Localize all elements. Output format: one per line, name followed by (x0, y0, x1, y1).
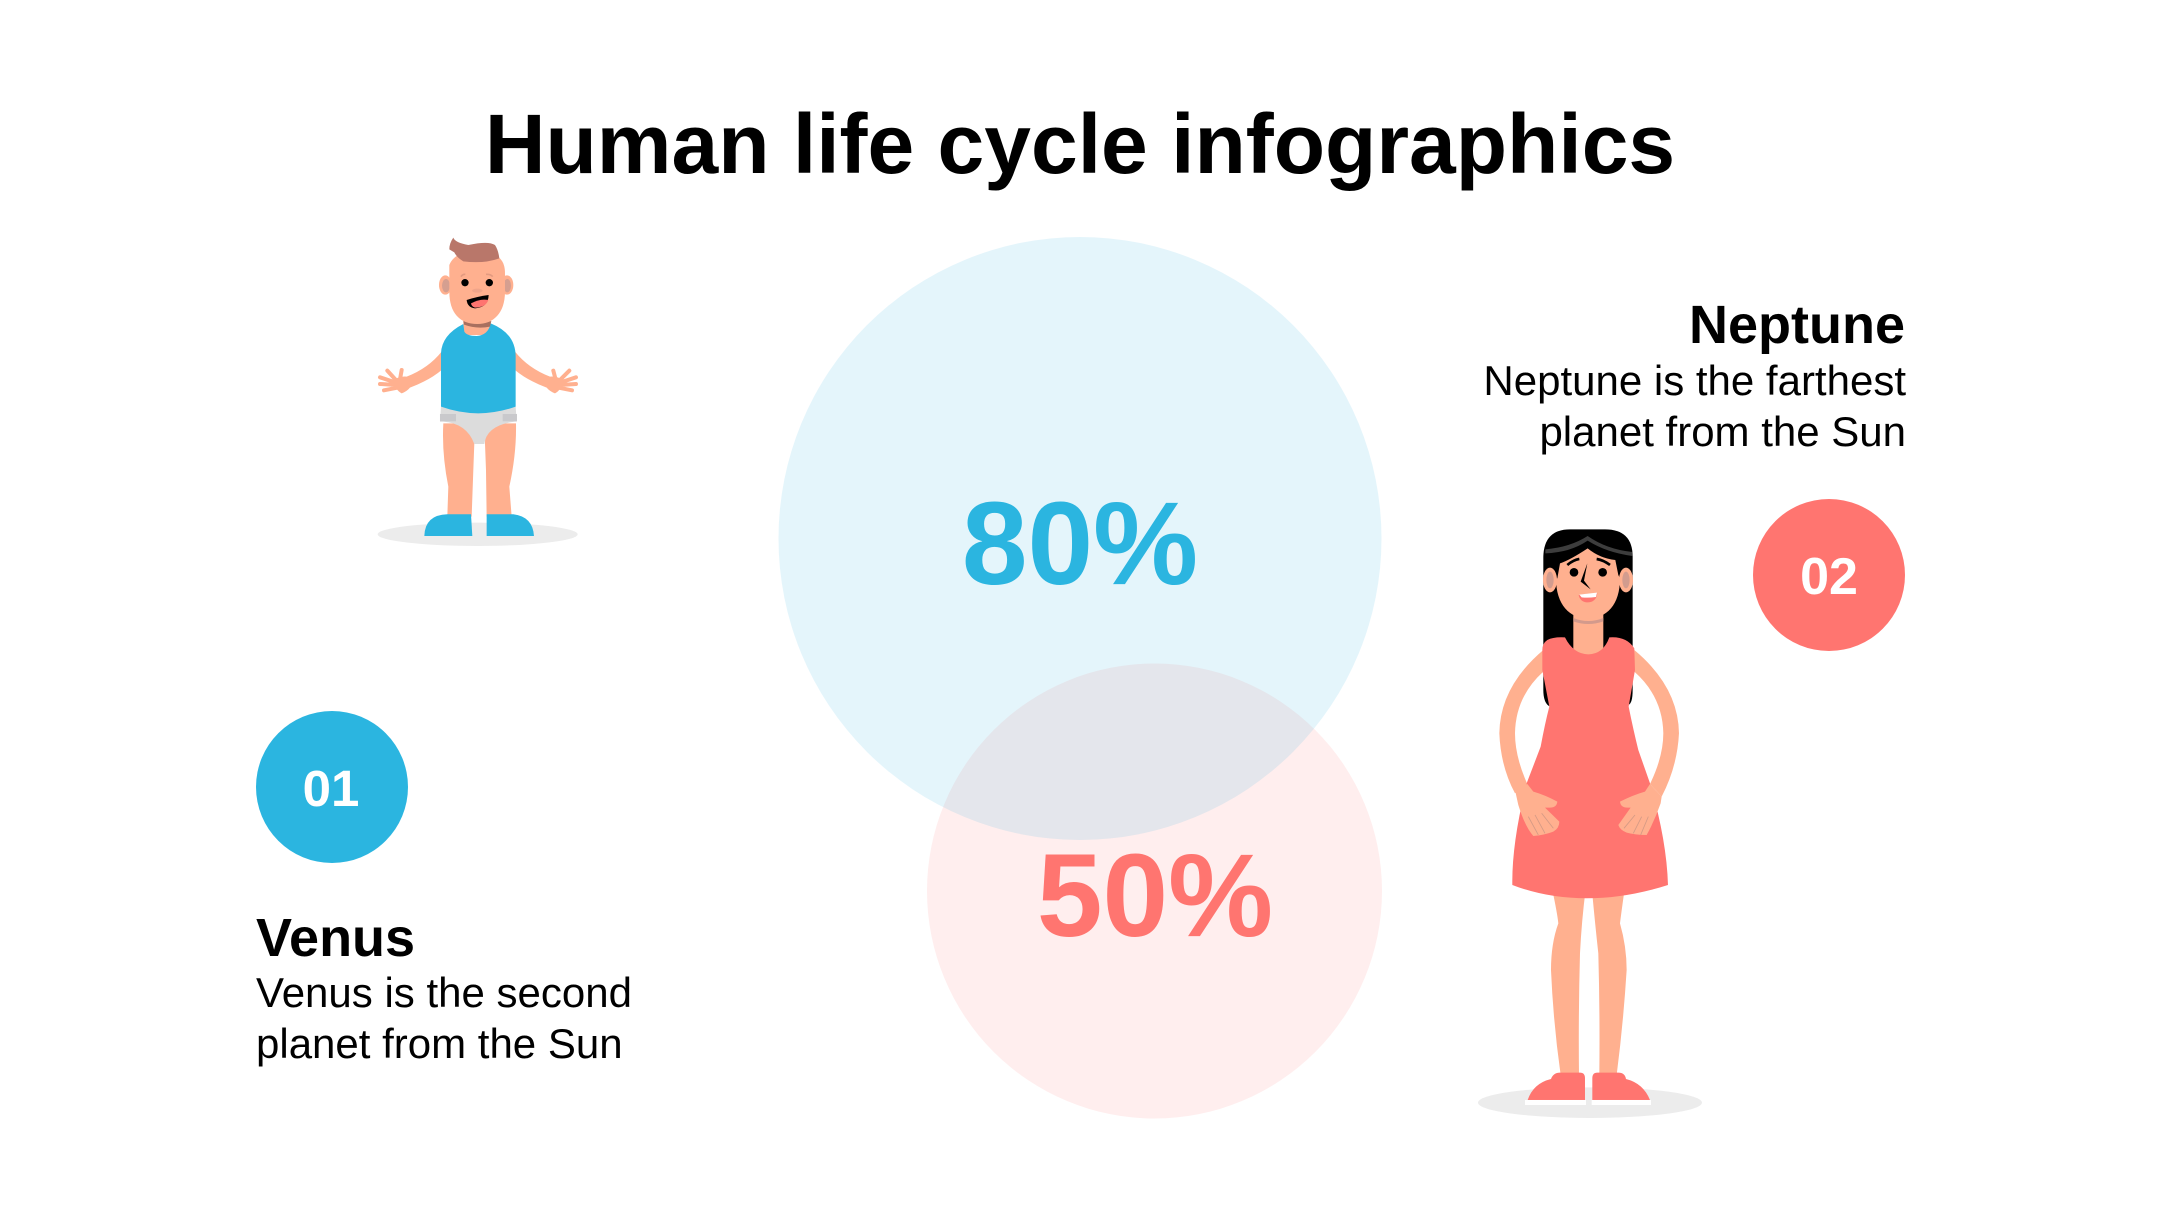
text block: Neptune: Neptune is the farthest (1483, 357, 1906, 404)
title: Human life cycle infographics (485, 97, 1675, 191)
badge 02: 02 (1800, 548, 1858, 606)
badge 01: 01 (303, 760, 359, 817)
text block: Venus: Venus (256, 908, 415, 968)
circle: 50% pink (927, 664, 1382, 1118)
text block: Neptune: planet from the Sun (1539, 408, 1906, 455)
overlapping circle chart (778, 237, 1382, 1118)
text block: Venus: planet from the Sun (256, 1020, 623, 1067)
value: 50%: 50% (1037, 830, 1273, 962)
icon: baby (378, 238, 578, 546)
text block: Venus (256, 908, 632, 1067)
value: 80%: 80% (962, 478, 1198, 610)
icon: woman (1478, 529, 1702, 1118)
text block: Neptune (1483, 295, 1906, 455)
woman legs and shoes (1478, 887, 1702, 1118)
circle: 80% blue (778, 237, 1382, 840)
badge 01 (256, 711, 408, 863)
text block: Neptune: Neptune (1689, 295, 1905, 355)
woman upper body (1499, 529, 1679, 898)
badge 02 (1753, 499, 1905, 651)
text block: Venus: Venus is the second (256, 969, 632, 1016)
